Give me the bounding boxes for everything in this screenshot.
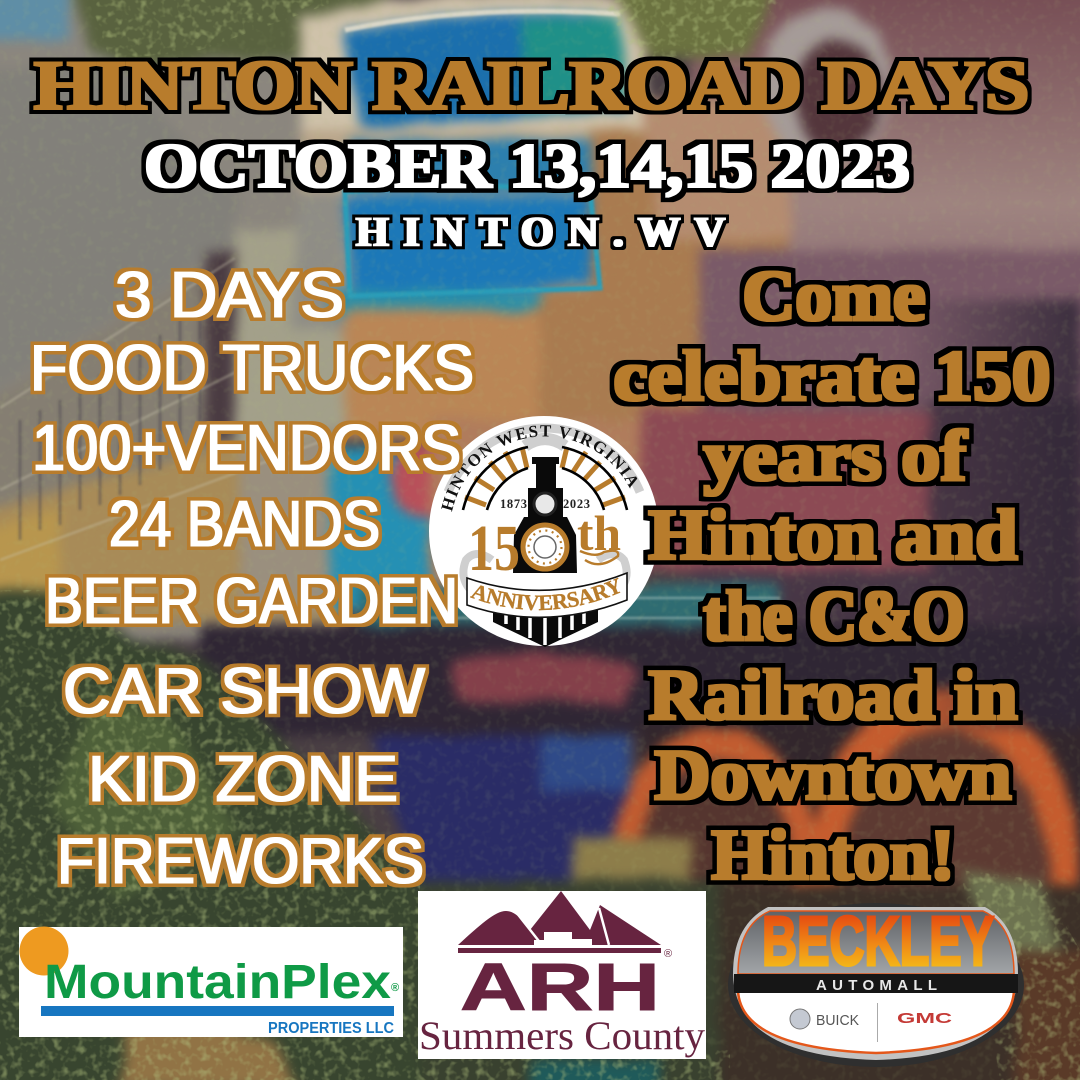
logo: MountainPlex Properties LLC (19, 926, 403, 1037)
text block: event attractions list: BEER GARDEN (45, 564, 458, 637)
text: Automall: AUTOMALL (816, 977, 937, 994)
text block: celebration message: Hinton and (648, 495, 1018, 575)
text block: event attractions list: 100+VENDORS (32, 411, 461, 484)
text block: celebration message: Downtown (654, 735, 1012, 815)
text: GMC: GMC (897, 1010, 952, 1027)
divider bar (41, 1006, 394, 1016)
text: Properties LLC: PROPERTIES LLC (268, 1020, 394, 1037)
text block: event attractions list: 3 DAYS (115, 258, 344, 331)
icon: sunburst rail tracks (463, 447, 627, 510)
text: registered mark: ® (664, 948, 672, 960)
icon: locomotive headlight (534, 493, 556, 515)
text: 150th: th (577, 505, 621, 561)
text block: celebration message: years of (704, 416, 968, 496)
text: registered mark: ® (391, 982, 399, 994)
text: 150th (468, 505, 621, 585)
text: Hinton West Virginia arc: HINTON WEST VIRGINIA (441, 425, 638, 512)
banner: Anniversary ribbon (467, 573, 627, 617)
icon: grey steam swirl (448, 428, 640, 600)
text: founding and anniversary years: 2023 (563, 497, 590, 511)
text block: celebration message: the C&O (704, 576, 964, 656)
icon: steam locomotive (493, 457, 598, 647)
text block: celebration message: Come (742, 256, 926, 336)
text: founding and anniversary years: 1873 (500, 497, 527, 511)
panel: white lower badge (738, 990, 1014, 1053)
text block: celebration message: Railroad in (648, 655, 1018, 735)
logo: ARH Summers County (418, 891, 706, 1059)
text block: event attractions list: FIREWORKS (57, 824, 424, 897)
text: MountainPlex: MountainPlex (44, 956, 391, 1009)
title: Hinton Railroad Days: HINTON RAILROAD DAYS (34, 47, 1029, 125)
text block: event attractions list (30, 258, 474, 897)
text: Anniversary: ANNIVERSARY (470, 578, 620, 610)
text block: event attractions list: CAR SHOW (63, 654, 426, 727)
icon: Buick emblem (790, 1009, 810, 1029)
text: 150th: 15 (468, 512, 520, 585)
icon: gold wheel zero (523, 525, 567, 569)
heading: event dates: OCTOBER 13,14,15 2023 (144, 130, 910, 201)
logo: Hinton 150th anniversary emblem (429, 416, 656, 647)
text block: event attractions list: KID ZONE (88, 742, 398, 815)
logo: Beckley Automall (728, 902, 1024, 1067)
text: founding and anniversary years (500, 497, 590, 511)
text block: event attractions list: 24 BANDS (109, 487, 380, 560)
text: Buick: BUICK (816, 1012, 859, 1029)
icon: orange sun (20, 926, 68, 976)
icon: burgundy mountains (458, 891, 661, 953)
text block: celebration message (614, 256, 1050, 895)
text: Summers County: Summers County (419, 1013, 705, 1058)
text block: celebration message: Hinton! (712, 815, 954, 895)
text: ARH: ARH (460, 950, 660, 1025)
heading: location: HINTON.WV (356, 210, 725, 256)
text block: event attractions list: FOOD TRUCKS (30, 331, 474, 404)
icon: gold flourish (580, 551, 618, 564)
text block: celebration message: celebrate 150 (614, 336, 1050, 416)
